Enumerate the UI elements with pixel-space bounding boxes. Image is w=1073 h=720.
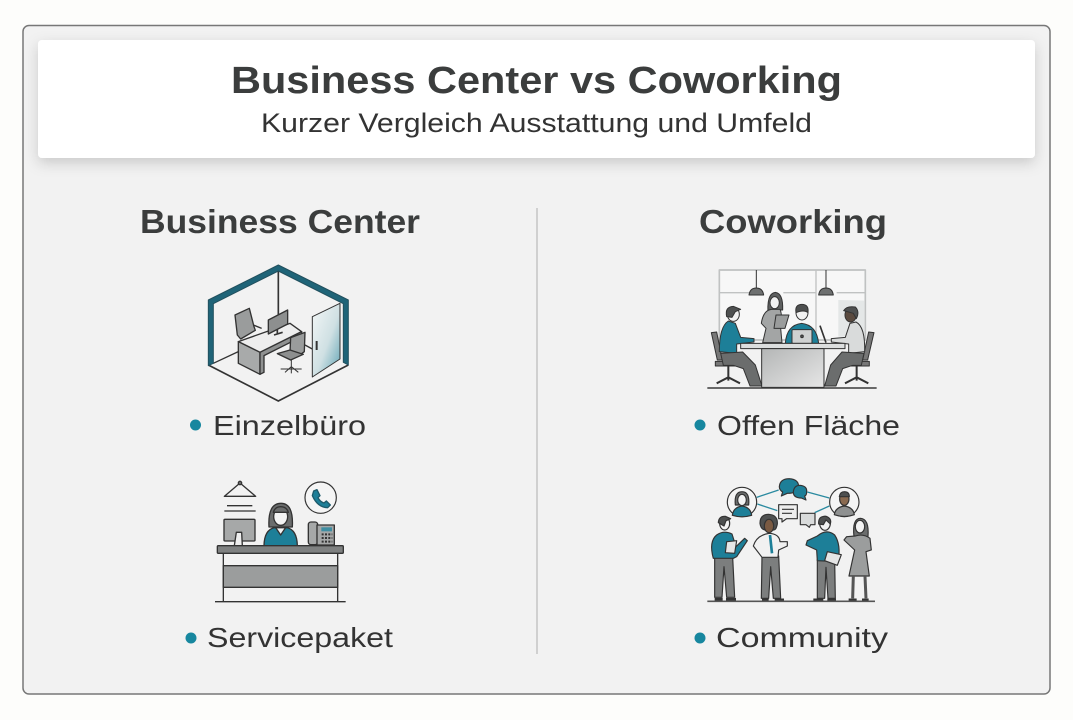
person 2 <box>753 514 787 600</box>
sign <box>224 483 256 511</box>
title: Business Center vs Coworking <box>231 60 842 102</box>
man left <box>711 332 722 360</box>
icon: single office room <box>208 265 348 401</box>
center divider <box>536 208 538 654</box>
man center <box>785 323 819 343</box>
connectors <box>757 490 829 513</box>
chat bubbles <box>779 479 799 496</box>
header card <box>38 40 1035 158</box>
woman standing <box>768 292 783 317</box>
telephone <box>308 522 318 545</box>
label: Offen Fläche: Offen Fläche <box>717 410 900 441</box>
avatar right <box>830 487 859 517</box>
avatar left <box>727 487 757 517</box>
label: Einzelbüro: Einzelbüro <box>213 410 366 441</box>
icon: open space meeting <box>707 270 877 388</box>
icon: reception desk <box>215 481 346 602</box>
monitor <box>224 519 255 541</box>
small bubbles <box>779 505 797 522</box>
table <box>741 343 845 349</box>
icon: community group <box>707 479 875 601</box>
receptionist <box>269 503 292 527</box>
heading: Coworking: Coworking <box>699 203 887 240</box>
subtitle: Kurzer Vergleich Ausstattung und Umfeld <box>261 108 812 138</box>
label: Servicepaket: Servicepaket <box>207 622 393 653</box>
label: Community: Community <box>716 622 888 653</box>
person 4 <box>844 518 871 600</box>
person 1 <box>712 516 747 599</box>
man right <box>863 332 874 360</box>
desk <box>217 546 343 553</box>
heading: Business Center: Business Center <box>140 203 420 240</box>
person 3 <box>806 516 841 600</box>
call bubble <box>305 482 336 513</box>
